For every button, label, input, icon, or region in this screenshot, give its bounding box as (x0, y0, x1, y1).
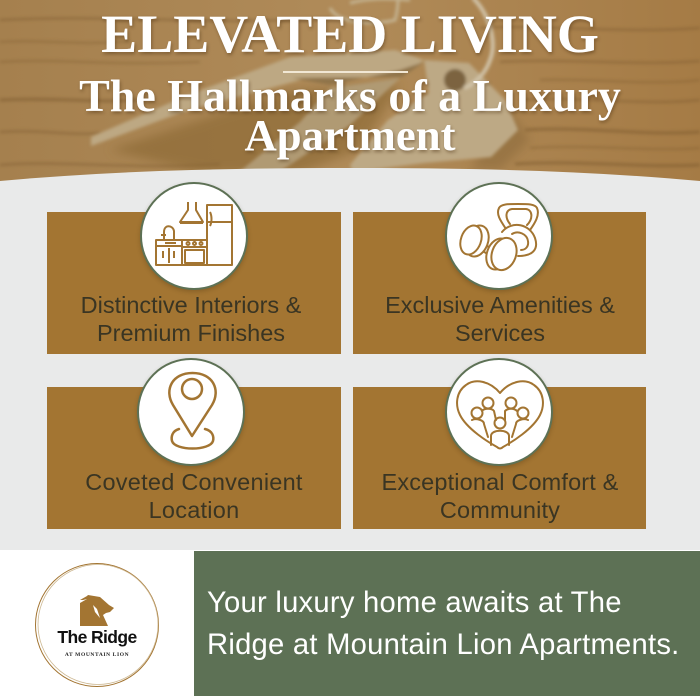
card label (81, 292, 301, 346)
card label: Services (455, 320, 545, 346)
card label (382, 469, 618, 523)
card background (47, 212, 341, 354)
key rings (464, 0, 493, 88)
callout text: Ridge at Mountain Lion Apartments. (207, 629, 680, 661)
panel: exceptional comfort (353, 358, 646, 529)
subtitle: The Hallmarks of a Luxury (79, 70, 621, 121)
card background (353, 212, 646, 354)
icon: kitchen (140, 182, 248, 290)
gray panel with curved top (0, 168, 700, 550)
card label (85, 469, 303, 523)
header photo: keys on wood (0, 0, 700, 181)
card label: Distinctive Interiors & (81, 292, 301, 318)
subtitle line 2: Apartment (244, 110, 455, 160)
logo: The Ridge at Mountain Lion (35, 563, 159, 687)
logo ring and mountain lion mark (35, 563, 159, 687)
key three (350, 60, 518, 172)
icon: location pin (137, 358, 245, 466)
card label: Premium Finishes (97, 320, 285, 346)
icon: dumbbell and kettlebell (445, 182, 553, 290)
panel: distinctive interiors (47, 182, 341, 354)
panel: exclusive amenities (353, 182, 646, 354)
callout: green banner (194, 551, 700, 696)
key head shade (292, 62, 424, 85)
card label: Coveted Convenient (85, 469, 303, 495)
card label: Community (440, 497, 560, 523)
title divider (283, 71, 408, 72)
logo tagline: AT MOUNTAIN LION (65, 652, 129, 658)
card background (47, 387, 341, 529)
title: ELEVATED LIVING (101, 4, 599, 64)
key two (232, 78, 400, 178)
icon: heart with family (445, 358, 553, 466)
panel: coveted location (47, 358, 341, 529)
card background (353, 387, 646, 529)
card label: Exclusive Amenities & (385, 292, 615, 318)
callout text (207, 587, 680, 661)
card label: Exceptional Comfort & (382, 469, 618, 495)
card label (385, 292, 615, 346)
key blade one (91, 50, 424, 146)
card label: Location (149, 497, 239, 523)
callout text: Your luxury home awaits at The (207, 587, 622, 619)
logo wordmark: The Ridge (57, 627, 137, 647)
